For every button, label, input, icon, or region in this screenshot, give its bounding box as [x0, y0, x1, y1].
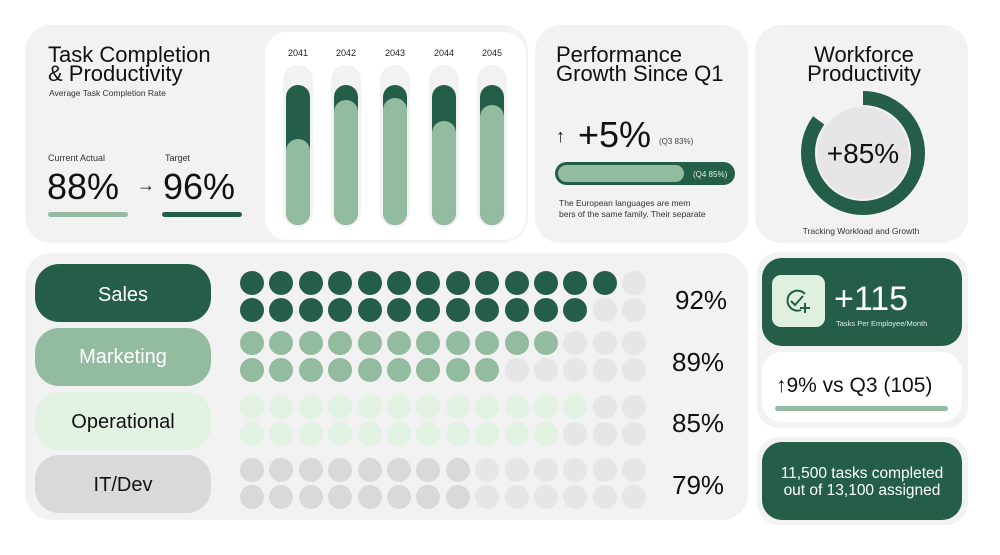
progress bar — [555, 162, 735, 185]
card: vs Q3: ↑9% vs Q3 (105) — [776, 374, 932, 397]
percentages: 89% — [672, 347, 724, 377]
pill: operational: Operational — [71, 411, 175, 433]
pill: marketing — [35, 328, 211, 386]
caption: Tracking Workload and Growth — [803, 226, 920, 236]
percentages: 85% — [672, 408, 724, 438]
panel: tasks completed: out of 13,100 assigned — [784, 482, 940, 499]
chart: yearly bars: 2041 — [288, 48, 308, 58]
progress bar: (Q4 85%) — [693, 170, 728, 179]
chart: yearly bars: 2043 — [385, 48, 405, 58]
dot matrix — [240, 271, 646, 509]
chart: yearly bars: 2045 — [482, 48, 502, 58]
label: target: Target — [165, 153, 191, 163]
heading: performance growth: Growth Since Q1 — [556, 61, 724, 86]
text block: bers of the same family. Their separate — [559, 209, 706, 219]
heading: task completion — [48, 42, 211, 86]
heading: performance growth: Performance — [556, 42, 682, 67]
pill: sales — [35, 264, 211, 322]
subtitle: Average Task Completion Rate — [49, 88, 166, 98]
stat: +5% — [556, 114, 694, 155]
icon: check plus — [772, 275, 825, 327]
panel: tasks per employee — [757, 252, 968, 428]
heading: performance growth — [556, 42, 724, 86]
stat: 88% to 96%: 96% — [163, 166, 235, 207]
bar: current — [48, 212, 128, 217]
pill: it/dev — [35, 455, 211, 513]
stat: 88% to 96%: 88% — [47, 166, 119, 207]
panel: tasks completed — [757, 437, 968, 525]
heading: workforce productivity: Workforce — [814, 42, 914, 67]
label: current actual: Current Actual — [48, 153, 105, 163]
stat: +5%: ↑ — [556, 126, 565, 146]
pill: marketing: Marketing — [79, 346, 167, 368]
donut chart — [808, 98, 918, 208]
panel: department dots — [25, 253, 748, 520]
panel: performance growth — [535, 25, 748, 243]
heading: workforce productivity: Productivity — [807, 61, 921, 86]
pill: it/dev: IT/Dev — [94, 474, 152, 496]
percentages — [672, 285, 727, 500]
panel: tasks completed: 11,500 tasks completed — [781, 465, 943, 482]
stat: 88% to 96% — [47, 166, 235, 207]
card: +115 — [762, 258, 962, 346]
donut chart: +85% — [827, 138, 899, 169]
text block — [559, 198, 706, 219]
stat: +5%: (Q3 83%) — [659, 137, 694, 146]
card: vs Q3 — [762, 352, 962, 422]
bar: target — [162, 212, 242, 217]
chart: yearly bars: 2042 — [336, 48, 356, 58]
card: +115: +115 — [834, 280, 908, 318]
text block: The European languages are mem — [559, 198, 690, 208]
percentages: 79% — [672, 470, 724, 500]
percentages: 92% — [675, 285, 727, 315]
heading: task completion: Task Completion — [48, 42, 211, 67]
chart: yearly bars: 2044 — [434, 48, 454, 58]
heading: workforce productivity — [807, 42, 921, 86]
pill: operational — [35, 392, 211, 450]
stat: 88% to 96%: → — [137, 175, 155, 195]
chart: yearly bars — [265, 32, 526, 240]
stat: +5%: +5% — [578, 114, 651, 155]
pill: sales: Sales — [98, 284, 148, 306]
card: +115: Tasks Per Employee/Month — [836, 319, 927, 328]
panel: task completion — [25, 25, 528, 243]
panel: workforce productivity — [755, 25, 968, 243]
heading: task completion: & Productivity — [48, 61, 182, 86]
